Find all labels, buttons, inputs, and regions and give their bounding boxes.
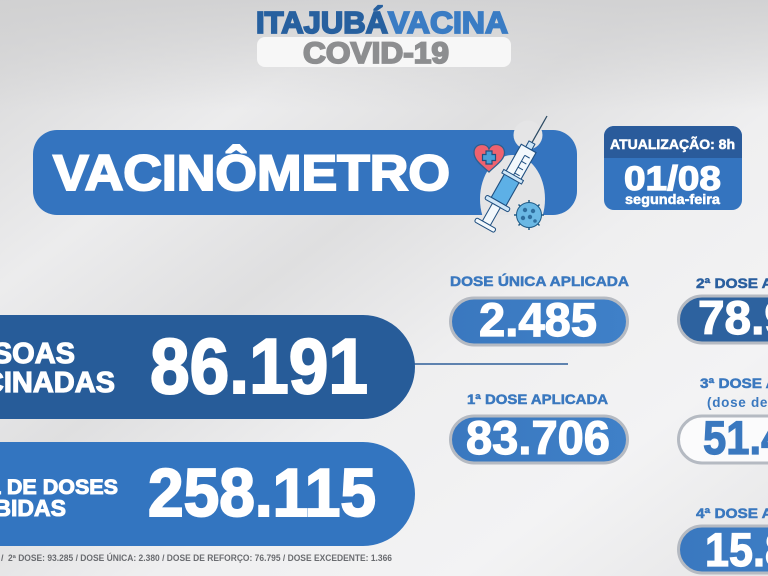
stat: 1ª dose <box>450 391 628 464</box>
value: total de doses: 258.115 <box>148 455 376 531</box>
icon: heart with cross <box>474 144 504 172</box>
stat: dose única <box>450 272 629 346</box>
stat: 3ª dose <box>678 375 768 464</box>
stat: 1ª dose: 1ª DOSE APLICADA <box>467 391 608 407</box>
stat: 2ª dose <box>678 275 768 344</box>
value: pessoas vacinadas: 86.191 <box>150 322 368 410</box>
connector line <box>410 363 568 365</box>
header logo <box>256 5 511 70</box>
stat: dose única: 2.485 <box>479 293 597 346</box>
date: 01/08 <box>624 160 721 198</box>
title: Itajubá Vacina <box>256 5 508 40</box>
panel: pessoas vacinadas <box>0 315 415 419</box>
icon: virus <box>514 200 544 230</box>
footnote: dose breakdown: 2ª DOSE: 93.285 / DOSE ÚNICA: 2.380 / DOSE DE REFORÇO: 76.795 / DOSE EXCEDENTE: 1.366 <box>8 552 392 563</box>
title: Itajubá Vacina: ITAJUBÁ <box>256 5 388 40</box>
panel: vacinômetro banner <box>33 116 577 233</box>
stat: dose única: DOSE ÚNICA APLICADA <box>450 272 629 289</box>
panel: atualização <box>604 126 742 210</box>
title: Itajubá Vacina: VACINA <box>388 5 508 40</box>
heading: vacinômetro: VACINÔMETRO <box>53 144 450 201</box>
update time: ATUALIZAÇÃO: 8h <box>610 135 735 152</box>
weekday: segunda-feira <box>625 191 720 207</box>
stat: 4ª dose <box>678 505 768 576</box>
label: total de doses recebidas <box>0 475 118 521</box>
stat: 1ª dose: 83.706 <box>466 411 610 464</box>
icon: syringe <box>472 109 559 234</box>
panel: total de doses recebidas <box>0 442 415 546</box>
subtitle: COVID-19: COVID-19 <box>303 37 449 70</box>
subtitle: COVID-19 <box>257 37 511 70</box>
label: pessoas vacinadas <box>0 338 115 399</box>
footnote: dose breakdown: / <box>1 553 4 563</box>
